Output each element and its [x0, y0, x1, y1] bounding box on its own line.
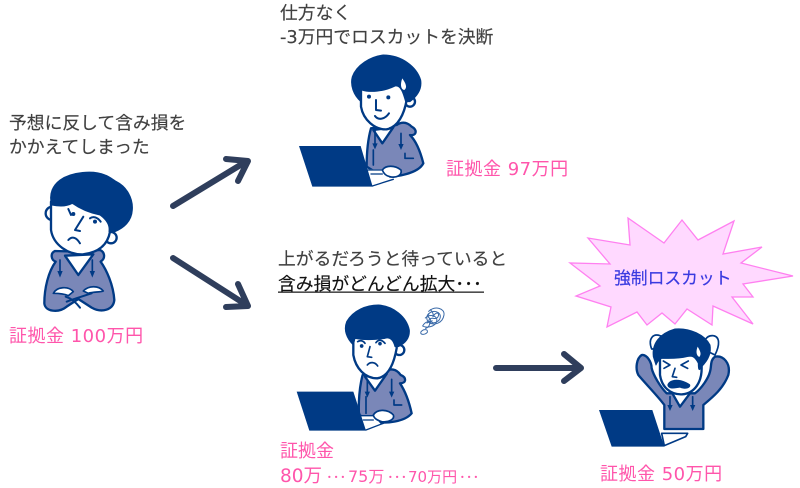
burst: forced stop-loss [570, 218, 793, 327]
text: stop-loss decision: -3万円でロスカットを決断 [280, 27, 494, 48]
icon: scribble thought [421, 308, 444, 334]
arrow: up to stop-loss [173, 159, 248, 206]
label: margin 97万円: 証拠金 97万円 [446, 159, 569, 180]
icon: man at laptop with sweat drop [299, 55, 423, 187]
arrow: on to forced liquidation [496, 354, 581, 381]
text: stop-loss decision: 仕方なく [280, 3, 351, 24]
label: margin falling: 70万円 [408, 468, 457, 486]
label: margin falling: 証拠金 [280, 441, 334, 462]
icon: worried man with crossed arms [44, 172, 132, 311]
icon: troubled man at laptop with scribble [297, 305, 444, 431]
text: waiting while the loss grows: 含み損がどんどん拡大･･･ [278, 274, 482, 295]
arrow: down to growing loss [173, 258, 248, 307]
text: stop-loss decision [280, 3, 494, 48]
label: margin falling: ･･･ [326, 470, 346, 486]
text: waiting while the loss grows: 上がるだろうと待っていると [278, 249, 507, 270]
icon: panicking man holding head [599, 329, 729, 447]
label: margin falling: ･･･ [387, 470, 407, 486]
label: margin falling: ･･･ [459, 470, 479, 486]
label: margin 100万円: 証拠金 100万円 [9, 326, 144, 347]
label: margin falling: 75万 [348, 467, 384, 486]
text: unrealized loss [9, 113, 186, 158]
label: margin 50万円: 証拠金 50万円 [600, 464, 723, 485]
label: margin falling: 80万 [280, 466, 322, 487]
text: unrealized loss: かかえてしまった [9, 137, 150, 158]
label: margin falling [280, 441, 479, 487]
text: waiting while the loss grows [278, 249, 507, 295]
text: unrealized loss: 予想に反して含み損を [9, 113, 186, 134]
burst: forced stop-loss: 強制ロスカット [614, 268, 731, 288]
